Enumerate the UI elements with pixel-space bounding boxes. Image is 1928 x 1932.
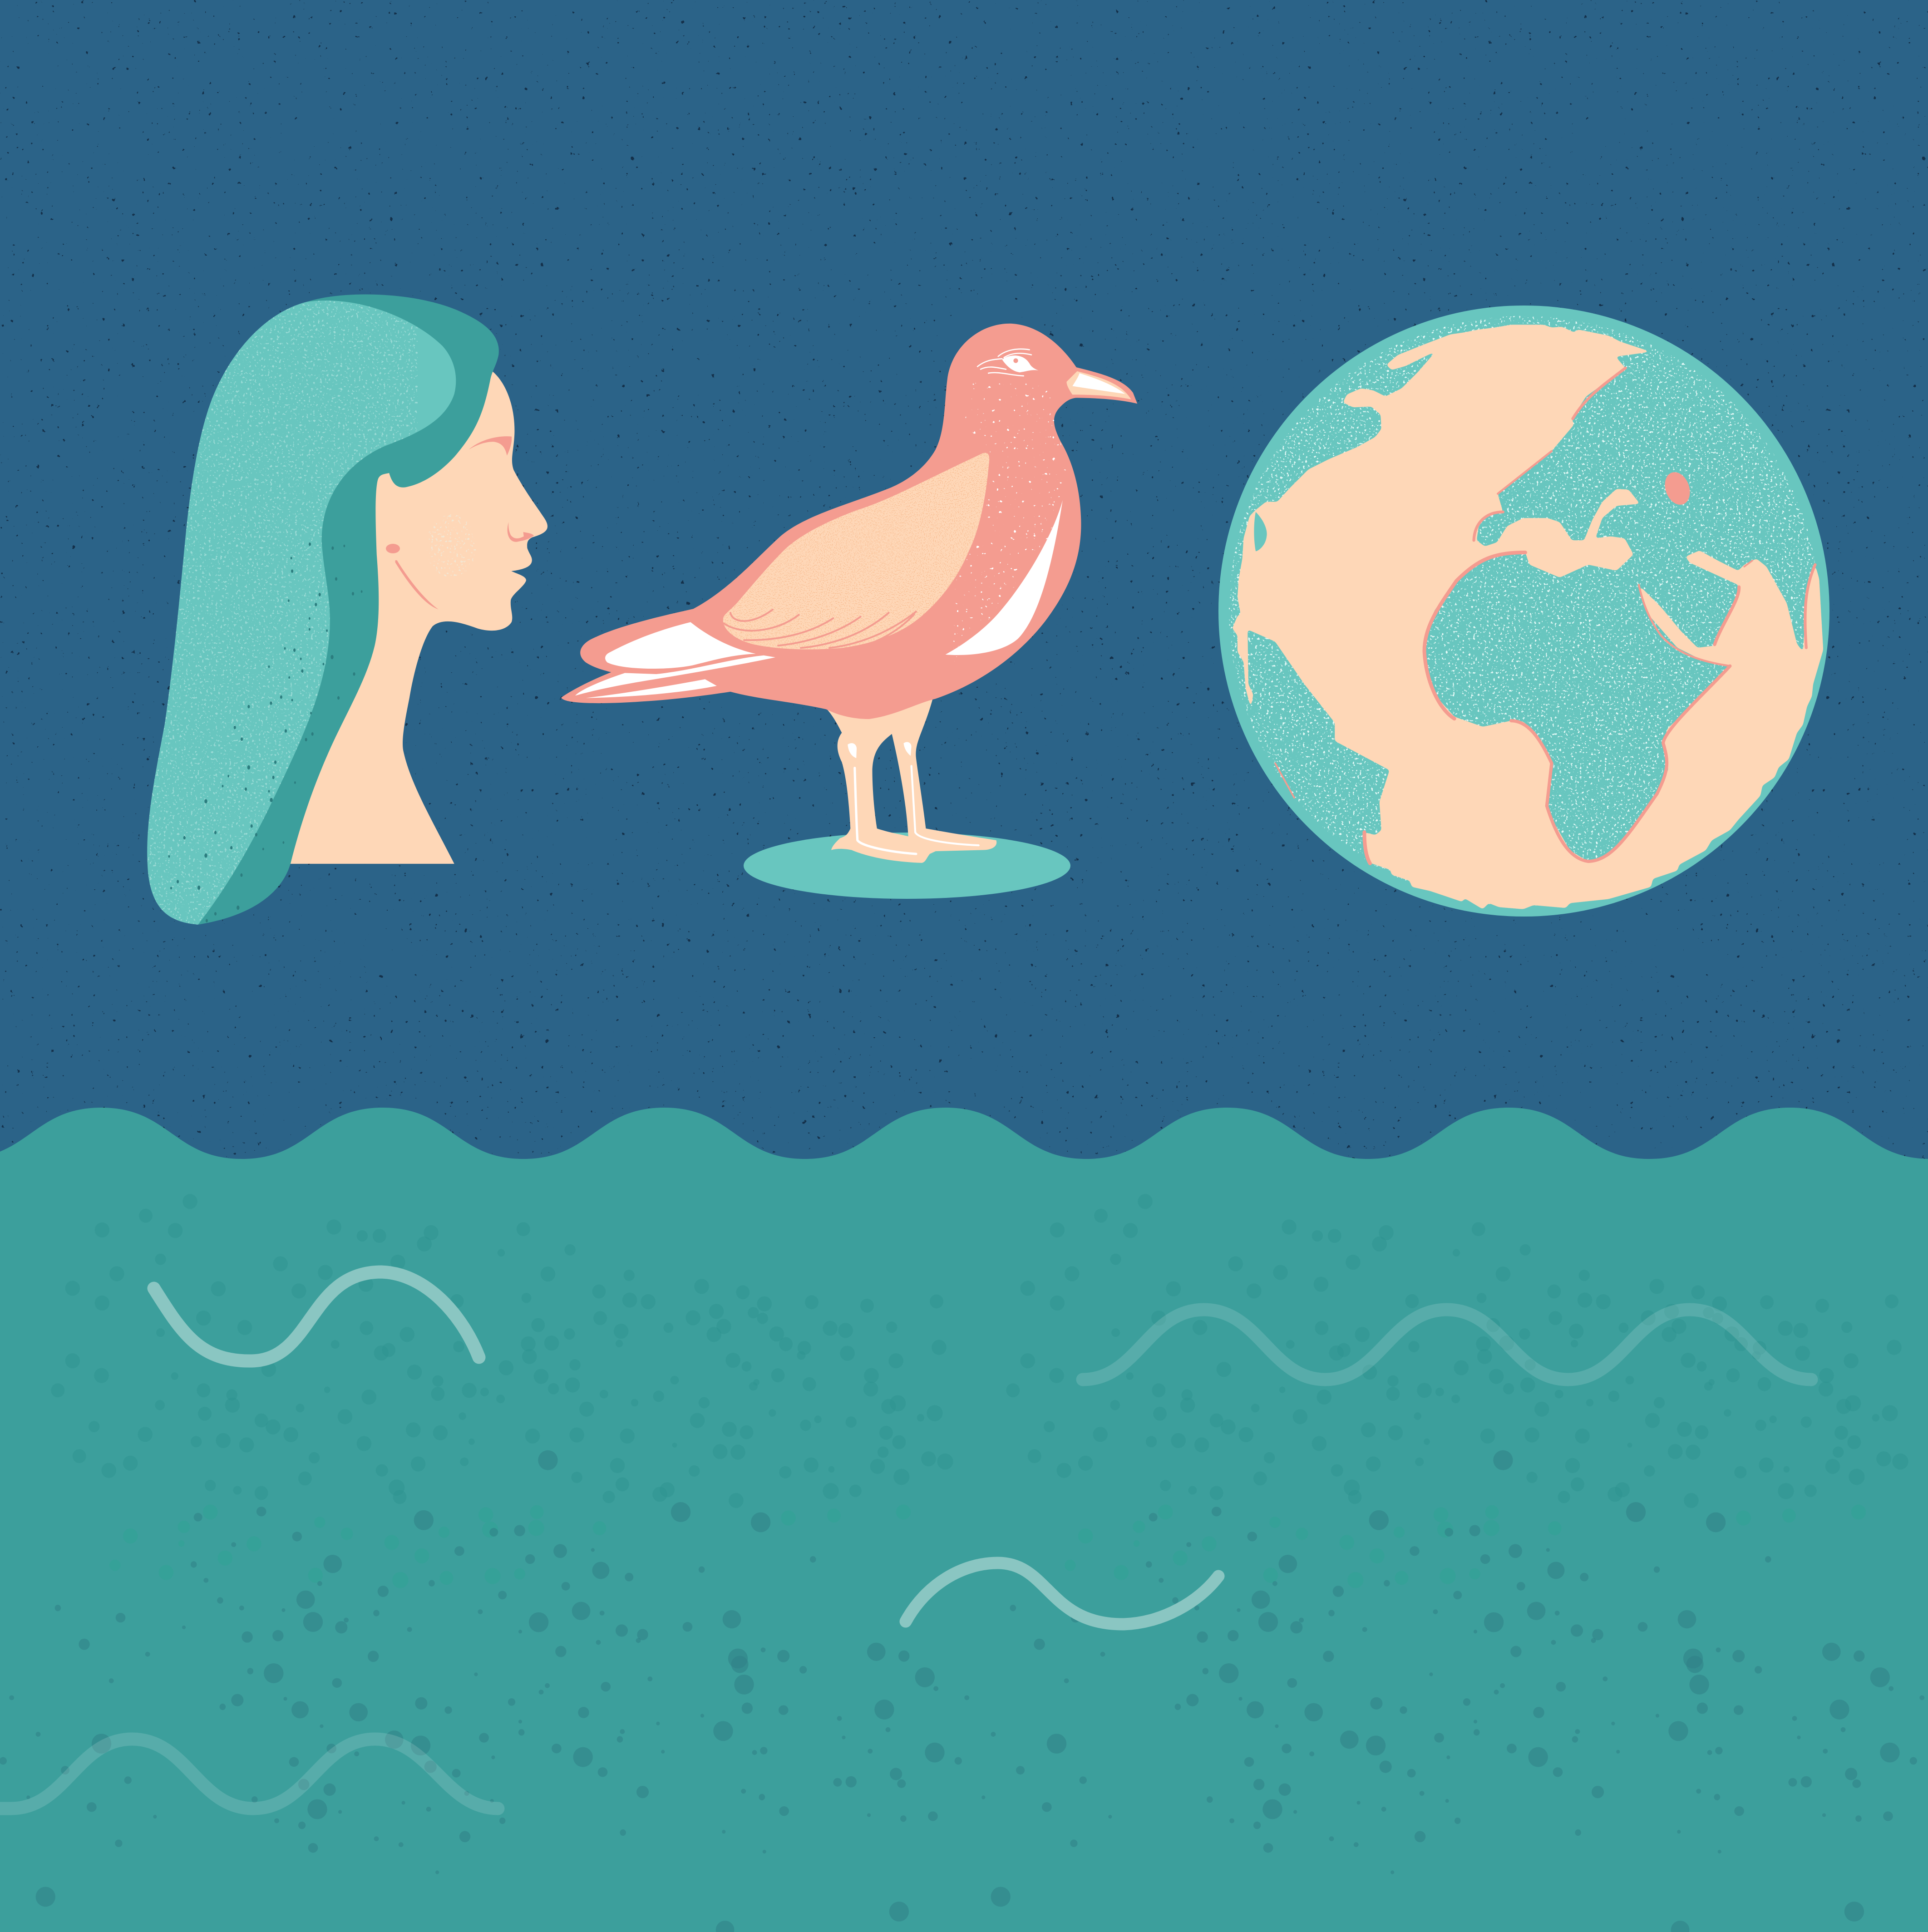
ground disc: [744, 833, 1070, 899]
sea body with scalloped wave crest: [0, 1108, 1928, 1932]
hair: dark splatter: [168, 542, 363, 922]
wing feather lines: [724, 610, 916, 648]
ear mark: [386, 544, 400, 553]
ocean disc: [1218, 306, 1829, 917]
lagoon at the left edge: [1254, 512, 1267, 551]
globe: [1218, 306, 1829, 917]
seagull on a teal disc: [561, 324, 1137, 899]
wave line: centre: [906, 1563, 1218, 1624]
eye and lashes: [977, 349, 1038, 376]
left leg: [827, 707, 931, 863]
coral marker spot: [1661, 468, 1694, 508]
tail white feathers: [575, 622, 775, 698]
wing grain: [717, 449, 990, 649]
breast white highlight: [946, 500, 1063, 655]
coral coastline shading: [1275, 368, 1815, 863]
nostril: [508, 522, 534, 542]
eyebrow and eye line: [469, 436, 512, 456]
wave line: upper left: [154, 1272, 479, 1361]
hair: light teal main layer: [147, 301, 456, 925]
wing: [723, 453, 989, 650]
ocean speckle: [1226, 313, 1825, 912]
bird body: [561, 324, 1081, 719]
jaw line: [395, 560, 439, 609]
woman in profile: [136, 291, 547, 931]
wave line: lower left: [0, 1739, 498, 1809]
leg highlights: [848, 742, 979, 854]
breast speckle: [953, 383, 1066, 662]
face and neck: [290, 371, 547, 864]
right leg: [889, 700, 996, 854]
sea bubbles: [0, 1194, 1928, 1932]
hair: dark teal under layer: [198, 294, 499, 925]
hair: pale speckle: [136, 291, 418, 931]
beak: [1064, 367, 1137, 404]
landmass: [1232, 325, 1823, 909]
cheek blush speckle: [427, 514, 476, 577]
wave line: right: [1083, 1310, 1811, 1380]
panel: sea: [0, 1108, 1928, 1932]
